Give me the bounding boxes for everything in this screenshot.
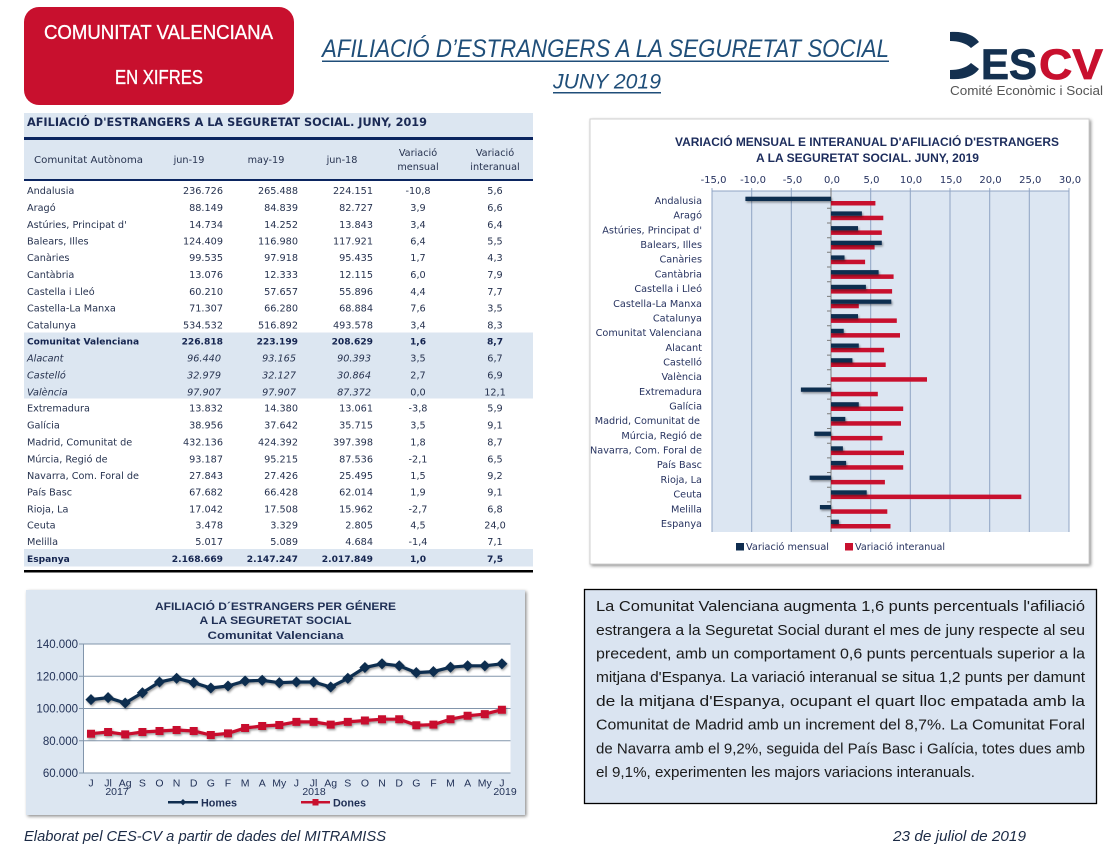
table header: may-19 <box>248 155 284 166</box>
row: Alacant: 90.393 <box>337 354 371 364</box>
row: Alacant: 6,7 <box>487 354 503 364</box>
row: Rioja: 17.042 <box>189 504 223 516</box>
row: Comunitat Valenciana: 1,6 <box>410 338 426 348</box>
row: Alacant: Alacant <box>26 354 65 364</box>
row: Ceuta: 4,5 <box>410 520 426 532</box>
row: Extremadura: 14.380 <box>264 404 298 414</box>
row: Balears: 124.409 <box>183 236 223 248</box>
legend <box>736 542 945 553</box>
panel: line chart per gènere <box>26 590 525 815</box>
row: Canàries <box>27 252 503 264</box>
row: Ceuta: 3.329 <box>270 520 298 532</box>
text box: commentary: Comunitat de Madrid amb un increment del 8,7%. La Comunitat Foral <box>596 716 1085 734</box>
x axis labels: -10,0 <box>740 175 766 186</box>
category labels: País Basc <box>657 459 702 471</box>
row: Castelló: 30.864 <box>337 370 371 382</box>
row: Cantàbria: 6,0 <box>410 270 426 281</box>
row: País Basc: País Basc <box>27 486 72 498</box>
row: Balears: 6,4 <box>410 236 426 248</box>
row: Madrid: 8,7 <box>487 438 503 448</box>
x axis labels: My <box>478 778 493 790</box>
row: Melilla: Melilla <box>27 537 58 548</box>
row: Castelló: 32.127 <box>262 370 297 382</box>
row: Andalusia: -10,8 <box>405 186 431 197</box>
row: Canàries: 99.535 <box>189 253 223 264</box>
row: Galícia: 9,1 <box>487 420 503 432</box>
row: Navarra: Navarra, Com. Foral de <box>27 471 139 482</box>
row: Balears: 116.980 <box>258 236 298 248</box>
chart title <box>155 600 396 642</box>
row: Aragó <box>27 202 503 214</box>
row: Múrcia: 6,5 <box>487 454 503 466</box>
row: Castella-La Manxa: 3,5 <box>487 304 503 314</box>
table header: Variació <box>399 147 437 159</box>
row: València: 0,0 <box>410 388 426 398</box>
x axis labels: 5,0 <box>864 175 879 186</box>
row: Aragó: 3,9 <box>410 203 426 214</box>
category labels: Castella i Lleó <box>634 283 702 295</box>
category labels: Catalunya <box>653 313 702 324</box>
row: Madrid: 432.136 <box>183 438 223 448</box>
legend: Variació interanual <box>855 542 945 553</box>
row: València: 12,1 <box>484 388 506 398</box>
x axis labels: 30,0 <box>1059 175 1081 186</box>
row: Catalunya: 3,4 <box>410 320 426 332</box>
x axis labels <box>701 175 1081 186</box>
text box: commentary: mitjana d'Espanya. La variació interanual se situa 1,2 punts per damunt <box>596 669 1086 686</box>
row: València: 97.907 <box>187 388 222 398</box>
x axis labels: O <box>155 778 164 790</box>
row: Catalunya <box>27 320 503 332</box>
title: JUNY 2019 <box>552 70 661 94</box>
row: Balears: Balears, Illes <box>27 236 89 248</box>
text box: commentary <box>584 590 1096 804</box>
row: Espanya: 2.017.849 <box>322 555 373 565</box>
row: Alacant <box>26 354 503 364</box>
table header: Variació <box>476 147 514 159</box>
row: Andalusia <box>27 186 503 197</box>
row: Astúries: 14.734 <box>189 220 223 231</box>
legend <box>168 798 366 810</box>
row: Castelló <box>27 370 503 382</box>
x axis labels: S <box>139 778 146 790</box>
title <box>320 34 889 94</box>
x axis labels: D <box>395 778 403 790</box>
row: Canàries: 95.435 <box>339 253 373 264</box>
footer: date: 23 de juliol de 2019 <box>892 829 1026 845</box>
x axis labels: M <box>446 778 455 790</box>
x axis labels: Jl <box>310 778 317 790</box>
row: Rioja: 17.508 <box>264 504 298 516</box>
text box: commentary: La Comunitat Valenciana augmenta 1,6 punts percentuals l'afiliació <box>596 598 1085 615</box>
category labels: Galícia <box>669 400 702 412</box>
row: València: 87.372 <box>337 388 371 398</box>
row: Comunitat Valenciana: 208.629 <box>332 338 373 348</box>
row: Galícia: 3,5 <box>410 420 426 432</box>
x axis labels: D <box>190 778 198 790</box>
row: Canàries: Canàries <box>27 252 69 264</box>
row: Cantàbria: 7,9 <box>487 270 503 281</box>
row: Alacant: 3,5 <box>410 354 426 364</box>
line: Homes <box>86 659 506 708</box>
row: Extremadura: Extremadura <box>27 404 90 414</box>
row: Rioja <box>27 504 503 516</box>
row: País Basc: 66.428 <box>264 488 298 498</box>
row: Castella i Lleó <box>27 286 503 298</box>
category labels: Cantàbria <box>655 268 702 280</box>
row: Espanya: 2.168.669 <box>172 555 223 565</box>
row: Castelló: 6,9 <box>487 370 503 382</box>
row: Aragó: 6,6 <box>487 203 503 214</box>
row: Rioja: Rioja, La <box>27 504 69 516</box>
row: Andalusia: 236.726 <box>183 186 223 197</box>
table header: interanual <box>470 162 520 173</box>
row: Alacant: 93.165 <box>262 354 296 364</box>
row: Castella-La Manxa: 66.280 <box>264 304 298 314</box>
logo: CES-CV: CV <box>1039 41 1103 89</box>
plot area <box>84 644 510 773</box>
legend: Variació mensual <box>746 542 829 553</box>
panel: bar chart variació mensual i interanual <box>590 119 1089 564</box>
row: Múrcia: 93.187 <box>189 454 223 466</box>
row: Melilla: -1,4 <box>409 537 427 548</box>
row: Ceuta: Ceuta <box>27 520 56 532</box>
chart title: AFILIACIÓ D´ESTRANGERS PER GÉNERE <box>155 600 396 613</box>
category labels: Madrid, Comunitat de <box>595 416 700 427</box>
row: Balears: 117.921 <box>333 236 373 248</box>
row: Catalunya: 516.892 <box>258 320 298 332</box>
row: País Basc: 67.682 <box>189 488 223 498</box>
x axis labels: M <box>241 778 249 790</box>
badge: Comunitat Valenciana en xifres <box>24 7 294 105</box>
row: Melilla: 5.089 <box>270 537 298 548</box>
category labels: Aragó <box>673 210 702 222</box>
category labels: Canàries <box>660 254 702 266</box>
table header: Comunitat Autònoma <box>34 154 143 166</box>
row: Galícia: 38.956 <box>189 420 223 432</box>
x axis labels: A <box>259 778 266 790</box>
row: Rioja: 15.962 <box>339 504 373 516</box>
legend: Homes <box>201 798 237 810</box>
chart title <box>675 135 1059 165</box>
row: Múrcia: 95.215 <box>264 454 298 466</box>
row: País Basc: 1,9 <box>410 488 426 498</box>
logo: CES-CV: ES <box>981 41 1037 89</box>
row: Ceuta: 2.805 <box>345 520 373 532</box>
x axis labels <box>88 778 517 798</box>
row: Rioja: 6,8 <box>487 504 503 516</box>
row: Astúries: 3,4 <box>410 220 426 231</box>
row: Galícia <box>27 420 503 432</box>
x axis labels: J <box>499 778 505 790</box>
row: Cantàbria: 12.333 <box>264 270 298 281</box>
row: Astúries: 14.252 <box>264 220 298 231</box>
x axis labels: Jl <box>104 778 112 790</box>
row: Espanya: 2.147.247 <box>247 555 298 565</box>
category labels: Rioja, La <box>661 475 702 486</box>
category labels: Melilla <box>671 504 702 515</box>
x axis labels: J <box>294 778 299 790</box>
row: Espanya <box>27 555 503 565</box>
row: Madrid <box>27 438 503 448</box>
x axis labels: 15,0 <box>940 175 962 186</box>
row: Extremadura <box>27 404 503 414</box>
row: Castella-La Manxa: 71.307 <box>189 304 223 314</box>
row: Ceuta: 3.478 <box>195 520 223 532</box>
text box: commentary: precedent, amb un comportament 0,6 punts percentuals superior a la <box>596 646 1086 662</box>
row: Catalunya: 8,3 <box>487 320 503 332</box>
row: Castella i Lleó: Castella i Lleó <box>27 286 95 298</box>
highlight band: Comunitat Valenciana <box>24 332 533 398</box>
row: Galícia: Galícia <box>27 420 60 432</box>
row: Castella-La Manxa: 68.884 <box>339 304 373 314</box>
x axis labels: My <box>272 778 287 790</box>
row: Extremadura: -3,8 <box>409 404 427 414</box>
row: Extremadura: 13.832 <box>189 404 223 414</box>
row: Madrid: Madrid, Comunitat de <box>27 438 132 448</box>
row: Extremadura: 5,9 <box>487 404 503 414</box>
logo: CES-CV: Comité Econòmic i Social <box>950 83 1103 98</box>
row: Andalusia: 5,6 <box>487 186 503 197</box>
x axis labels: Ag <box>119 778 132 790</box>
row: Balears: 5,5 <box>487 236 503 248</box>
row: Espanya: 1,0 <box>410 555 426 565</box>
table title band: AFILIACIÓ D'ESTRANGERS A LA SEGURETAT SOCIAL. JUNY, 2019 <box>27 116 427 129</box>
row: Melilla: 4.684 <box>345 537 373 548</box>
x axis labels: G <box>207 778 215 790</box>
y axis labels: 120.000 <box>36 671 78 683</box>
row: Andalusia: Andalusia <box>27 186 74 197</box>
row: València <box>27 386 506 398</box>
badge: Comunitat Valenciana en xifres: COMUNITAT VALENCIANA <box>44 22 274 44</box>
row: Ceuta <box>27 520 506 532</box>
x axis labels: 10,0 <box>900 175 922 186</box>
chart title: Comunitat Valenciana <box>208 630 345 642</box>
row: País Basc <box>27 486 503 498</box>
row: Melilla <box>27 537 503 548</box>
row: Cantàbria <box>27 269 503 281</box>
row: Castella i Lleó: 7,7 <box>487 287 503 298</box>
table header: mensual <box>397 162 439 173</box>
row: Balears <box>27 236 503 248</box>
y axis labels: 80.000 <box>43 736 78 748</box>
row: València: València <box>27 386 68 398</box>
row: Madrid: 397.398 <box>333 438 373 448</box>
table bottom rule <box>24 570 533 572</box>
category labels <box>590 196 702 530</box>
row: Madrid: 424.392 <box>258 438 298 448</box>
row: Alacant: 96.440 <box>187 354 221 364</box>
row: Castella i Lleó: 55.896 <box>339 287 373 298</box>
category labels: Navarra, Com. Foral de <box>590 446 702 457</box>
row: Andalusia: 224.151 <box>333 186 373 197</box>
row: Comunitat Valenciana: 223.199 <box>257 338 298 348</box>
y axis labels: 60.000 <box>43 768 78 780</box>
x axis labels: -15,0 <box>701 175 726 186</box>
text box: commentary: de la mitjana d'Espanya, ocupant el quart lloc empatada amb la <box>596 693 1086 710</box>
row: Comunitat Valenciana <box>27 338 503 348</box>
table header: jun-18 <box>326 155 357 166</box>
x axis labels: A <box>464 778 471 790</box>
legend: Dones <box>333 798 366 810</box>
bars: variació mensual <box>745 197 891 524</box>
table header: jun-19 <box>173 155 204 166</box>
category labels: Andalusia <box>655 196 702 207</box>
row: Castelló: Castelló <box>27 370 66 382</box>
row: Comunitat Valenciana: 8,7 <box>487 338 503 348</box>
x axis labels: J <box>88 778 94 790</box>
row: Navarra <box>27 471 503 482</box>
row: Castelló: 2,7 <box>410 370 426 382</box>
table: afiliació per comunitat autònoma <box>24 113 533 572</box>
row: Castelló: 32.979 <box>187 370 221 382</box>
logo: CES-CV <box>950 32 1103 98</box>
row: Navarra: 27.843 <box>189 471 223 482</box>
category labels: Espanya <box>661 519 702 530</box>
x axis labels: S <box>344 778 351 790</box>
x axis labels: 2017 <box>105 786 129 798</box>
row: Navarra: 1,5 <box>410 471 426 482</box>
x axis labels: 2019 <box>493 786 517 798</box>
row: Cantàbria: 13.076 <box>189 270 223 281</box>
row: Múrcia: 87.536 <box>339 454 373 466</box>
row: Cantàbria: 12.115 <box>339 270 373 281</box>
row: Andalusia: 265.488 <box>258 186 298 197</box>
row: Cantàbria: Cantàbria <box>27 269 74 281</box>
highlight band: Espanya <box>24 549 533 566</box>
category labels: Castelló <box>663 356 702 368</box>
row: Galícia: 35.715 <box>339 420 373 432</box>
row: Navarra: 25.495 <box>339 471 373 482</box>
x axis labels: 0,0 <box>824 175 840 186</box>
row: Galícia: 37.642 <box>264 420 298 432</box>
x axis labels: N <box>378 778 386 790</box>
category labels: Alacant <box>666 343 702 354</box>
category labels: Múrcia, Regió de <box>621 430 702 442</box>
row: Catalunya: 534.532 <box>183 320 223 332</box>
table title band <box>24 113 533 137</box>
row: Astúries: 13.843 <box>339 220 373 231</box>
row: Extremadura: 13.061 <box>339 404 373 414</box>
x axis labels: 2018 <box>302 786 326 798</box>
plot background <box>712 191 1069 532</box>
category labels: Balears, Illes <box>640 240 702 251</box>
row: Astúries <box>27 219 503 231</box>
y axis labels: 100.000 <box>36 704 78 716</box>
category labels: Ceuta <box>673 490 702 501</box>
row: Castella i Lleó: 4,4 <box>410 287 426 298</box>
row: Navarra: 9,2 <box>487 471 503 482</box>
badge: Comunitat Valenciana en xifres: EN XIFRES <box>115 67 203 89</box>
row: Aragó: 84.839 <box>264 203 298 214</box>
text box: commentary: estrangera a la Seguretat Social durant el mes de juny respecte al seu <box>596 622 1085 639</box>
chart title: A LA SEGURETAT SOCIAL. JUNY, 2019 <box>756 151 979 165</box>
category labels: Astúries, Principat d' <box>602 224 702 236</box>
y axis labels: 140.000 <box>36 639 78 651</box>
row: Aragó: 82.727 <box>339 203 373 214</box>
row: Castella-La Manxa <box>27 304 503 314</box>
row: Astúries: Astúries, Principat d' <box>27 219 127 231</box>
chart title: A LA SEGURETAT SOCIAL <box>200 615 352 627</box>
x axis labels: 20,0 <box>979 175 1002 186</box>
row: Catalunya: Catalunya <box>27 320 76 332</box>
category labels: Castella-La Manxa <box>613 299 702 310</box>
bars: variació interanual <box>831 201 1021 528</box>
row: Múrcia <box>27 454 503 466</box>
row: Castella i Lleó: 57.657 <box>264 287 298 298</box>
row: Astúries: 6,4 <box>487 220 503 231</box>
row: Espanya: Espanya <box>27 555 70 565</box>
title: AFILIACIÓ D’ESTRANGERS A LA SEGURETAT SOCIAL <box>320 34 889 63</box>
row: Castella-La Manxa: Castella-La Manxa <box>27 304 116 314</box>
x axis labels: N <box>173 778 180 790</box>
row: Catalunya: 493.578 <box>333 320 373 332</box>
table header <box>24 137 533 181</box>
row: Múrcia: Múrcia, Regió de <box>27 454 108 466</box>
text box: commentary: el 9,1%, experimenten les majors variacions interanuals. <box>596 764 975 781</box>
text box: commentary: de Navarra amb el 9,2%, seguida del País Basc i Galícia, totes dues amb <box>596 740 1085 758</box>
chart title: VARIACIÓ MENSUAL E INTERANUAL D'AFILIACIÓ D'ESTRANGERS <box>675 135 1059 149</box>
category labels: València <box>661 371 702 383</box>
row: Espanya: 7,5 <box>487 555 503 565</box>
row: Aragó: Aragó <box>27 202 56 214</box>
row: País Basc: 62.014 <box>339 488 373 498</box>
row: Ceuta: 24,0 <box>484 520 506 532</box>
row: Rioja: -2,7 <box>409 504 427 516</box>
row: Aragó: 88.149 <box>189 203 223 214</box>
x axis labels: Ag <box>324 778 337 790</box>
row: Madrid: 1,8 <box>410 438 426 448</box>
category labels: Comunitat Valenciana <box>596 328 702 339</box>
row: Castella-La Manxa: 7,6 <box>410 304 426 314</box>
category labels: Extremadura <box>639 387 702 398</box>
row: Navarra: 27.426 <box>264 471 298 482</box>
line: Dones <box>88 706 505 738</box>
x axis labels: F <box>225 778 231 790</box>
row: Canàries: 97.918 <box>264 253 298 264</box>
row: Múrcia: -2,1 <box>409 454 427 466</box>
x axis labels: -5,0 <box>783 175 802 186</box>
row: Castella i Lleó: 60.210 <box>189 287 223 298</box>
x axis labels: 25,0 <box>1019 175 1041 186</box>
row: Comunitat Valenciana: Comunitat Valenciana <box>27 338 139 348</box>
x axis labels: O <box>361 778 369 790</box>
row: País Basc: 9,1 <box>487 488 503 498</box>
footer: source: Elaborat pel CES-CV a partir de dades del MITRAMISS <box>24 829 386 845</box>
x axis labels: F <box>430 778 437 790</box>
row: Melilla: 7,1 <box>487 537 503 548</box>
row: Melilla: 5.017 <box>195 537 223 548</box>
y axis labels <box>36 639 78 780</box>
x axis labels: G <box>412 778 420 790</box>
row: Canàries: 1,7 <box>410 253 426 264</box>
row: Comunitat Valenciana: 226.818 <box>182 338 223 348</box>
row: València: 97.907 <box>262 388 297 398</box>
row: Canàries: 4,3 <box>487 253 503 264</box>
